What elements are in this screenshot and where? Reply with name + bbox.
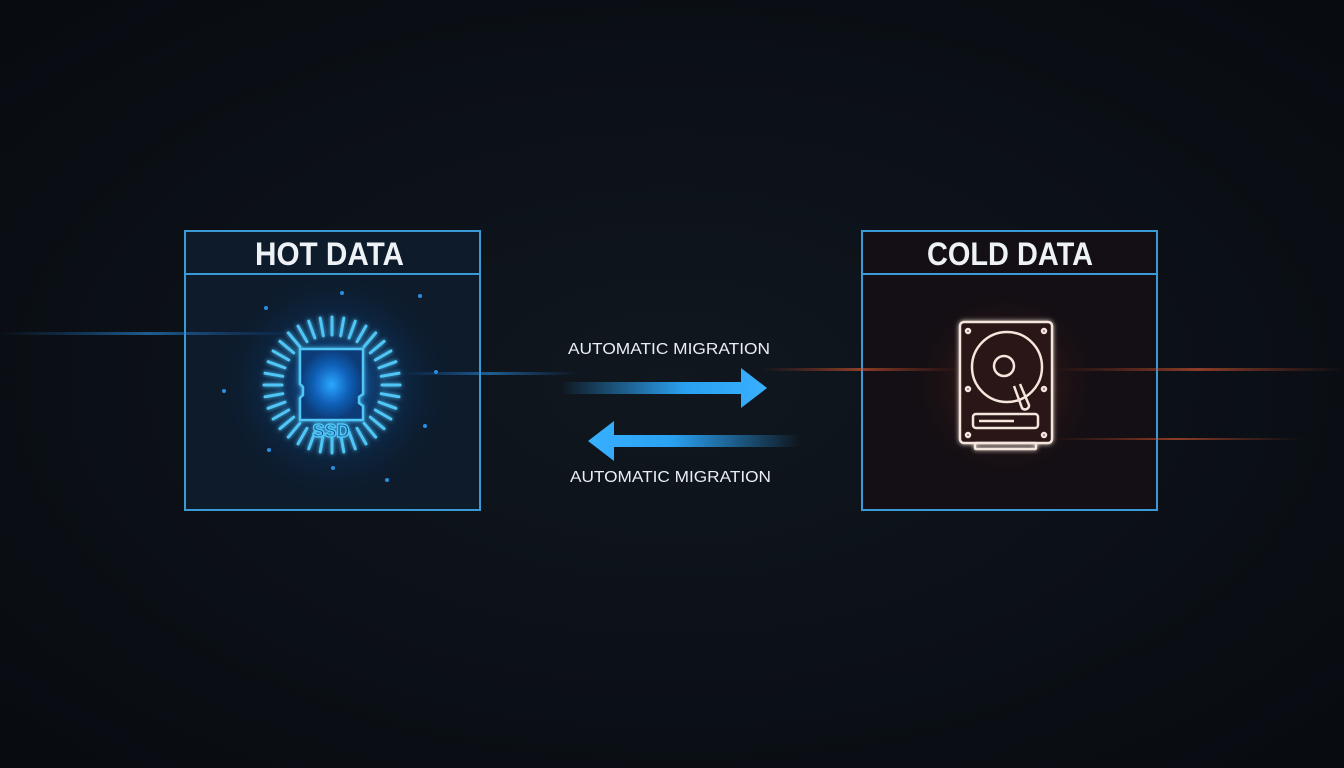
icon: ssd: SSD bbox=[312, 421, 350, 441]
heading: hot data: HOT DATA bbox=[255, 236, 404, 272]
panel: cold data bbox=[862, 231, 1157, 510]
heading: cold data: COLD DATA bbox=[927, 236, 1093, 272]
arrow: left bbox=[588, 421, 800, 461]
icon: hard drive bbox=[960, 322, 1052, 449]
panel: hot data bbox=[185, 231, 480, 510]
icon: ssd bbox=[264, 317, 400, 453]
label: bottom migration: AUTOMATIC MIGRATION bbox=[570, 469, 771, 486]
label: top migration: AUTOMATIC MIGRATION bbox=[568, 341, 770, 358]
arrow: right bbox=[560, 368, 767, 408]
